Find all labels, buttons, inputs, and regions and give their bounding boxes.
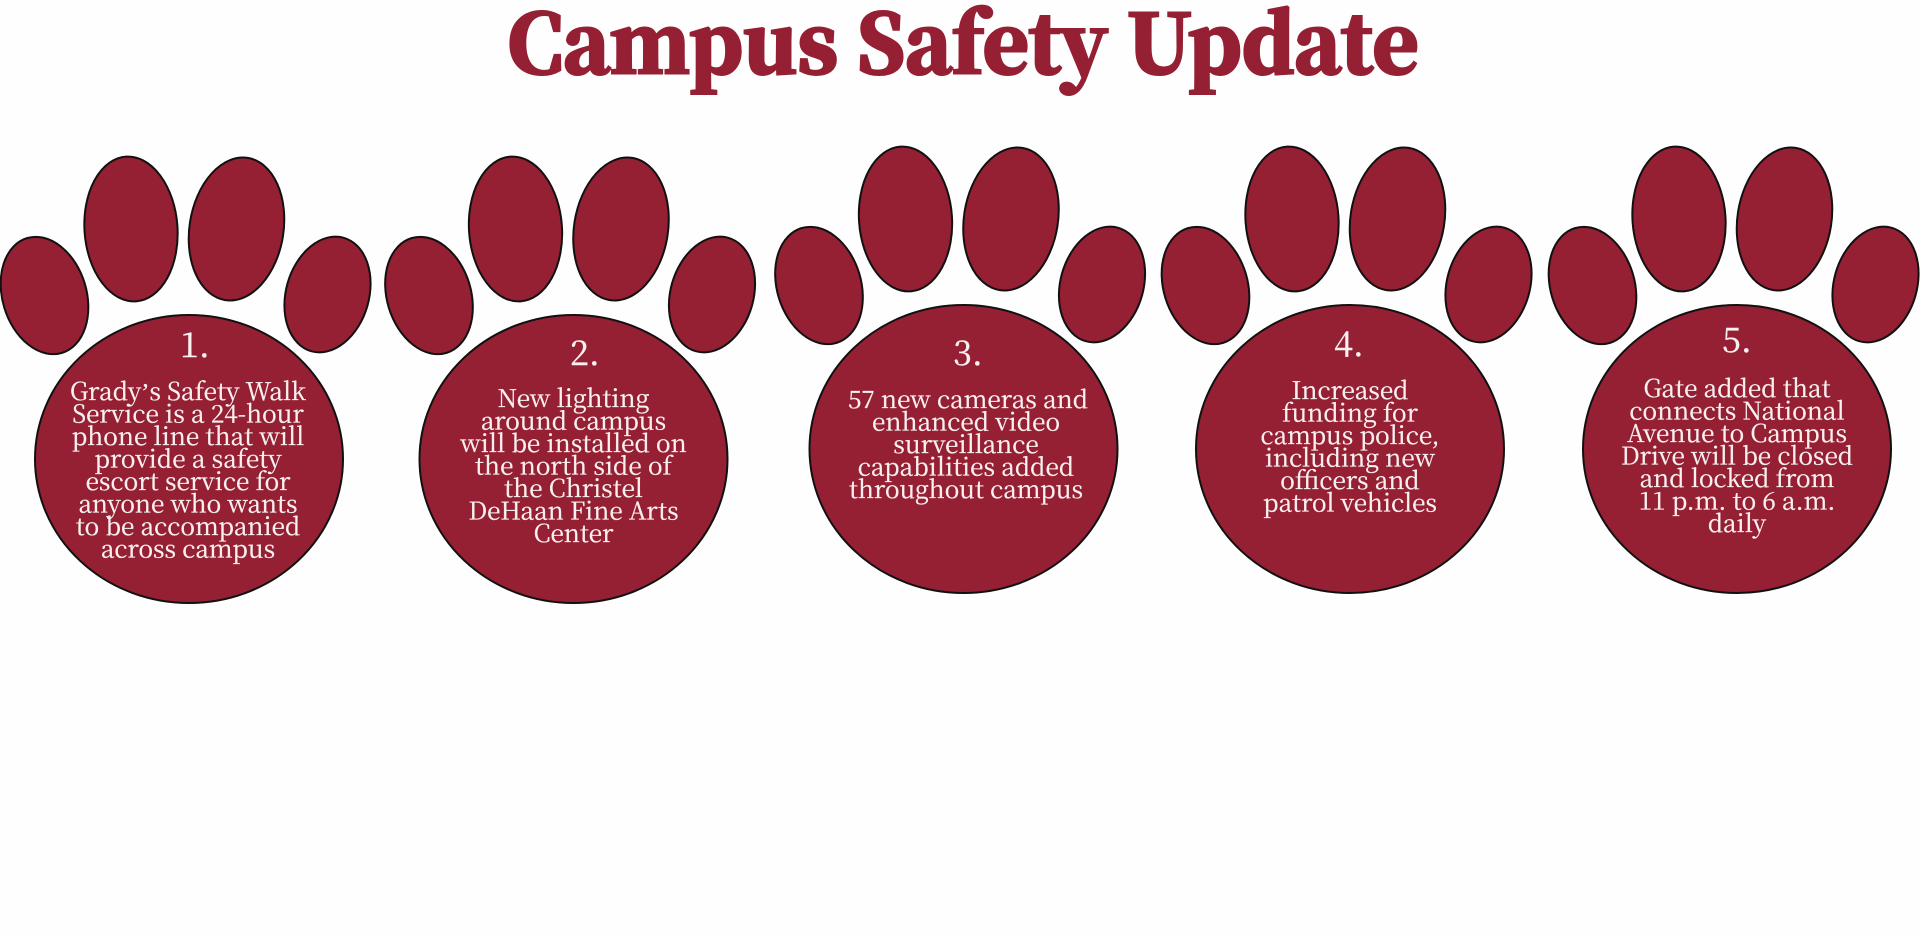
text block 4: including new	[1265, 438, 1436, 474]
text block 5: Drive will be closed	[1621, 436, 1853, 472]
icon: paw shape 4	[1148, 141, 1545, 593]
text block 2: DeHaan Fine Arts	[468, 492, 679, 526]
text block 2: will be installed on	[459, 424, 687, 459]
text block 1: Grady’s Safety Walk	[70, 372, 306, 407]
text block 1: phone line that will	[72, 417, 304, 452]
text block 2: New lighting	[498, 379, 650, 414]
text block 5: daily	[1708, 504, 1767, 539]
text block 5: Avenue to Campus	[1627, 414, 1847, 449]
text block 5: 11 p.m. to 6 a.m.	[1639, 482, 1835, 516]
text block 2: around campus	[481, 402, 666, 436]
icon: paw shape 2	[371, 151, 768, 603]
text block 1: escort service for	[86, 462, 291, 497]
panel: paw 3	[761, 141, 1158, 593]
number 1: 1.	[180, 318, 210, 367]
number 2: 2.	[570, 326, 600, 375]
text block 3: enhanced video	[872, 402, 1060, 438]
icon: paw shape 5	[1535, 141, 1920, 593]
text block 4: officers and	[1280, 461, 1420, 496]
text block 1	[70, 372, 306, 564]
text block 2: the north side of	[475, 446, 675, 482]
text block 3: 57 new cameras and	[848, 380, 1088, 415]
text block 4: campus police,	[1260, 416, 1440, 451]
text block 4	[1260, 371, 1440, 518]
panel: paw 2	[371, 151, 768, 603]
icon: paw shape 3	[761, 141, 1158, 593]
text block 2: Center	[534, 514, 614, 549]
text block 5: and locked from	[1640, 459, 1834, 494]
panel: paw 4	[1148, 141, 1545, 593]
text block 5	[1621, 369, 1853, 539]
text block 1: across campus	[101, 530, 275, 564]
text block 3: capabilities added	[858, 448, 1074, 482]
text block 1: provide a safety	[94, 440, 282, 474]
number 5: 5.	[1722, 313, 1752, 362]
panel: paw 5	[1535, 141, 1920, 593]
text block 2	[459, 379, 687, 549]
text block 2: the Christel	[504, 469, 643, 504]
text block 1: Service is a 24-hour	[72, 394, 304, 430]
text block 3: throughout campus	[849, 470, 1083, 505]
text block 5: Gate added that	[1643, 369, 1831, 404]
text block 1: to be accompanied	[76, 507, 300, 542]
text block 3: surveillance	[893, 425, 1039, 460]
text block 1: anyone who wants	[78, 484, 298, 520]
icon: paw shape 1	[0, 151, 384, 603]
text block 5: connects National	[1629, 392, 1845, 426]
number 3: 3.	[953, 326, 983, 375]
text block 4: Increased	[1291, 371, 1409, 406]
text block 4: patrol vehicles	[1263, 484, 1437, 518]
text block 4: funding for	[1282, 394, 1419, 428]
number 4: 4.	[1334, 317, 1364, 366]
panel: paw 1	[0, 151, 384, 603]
text block 3	[848, 380, 1088, 505]
